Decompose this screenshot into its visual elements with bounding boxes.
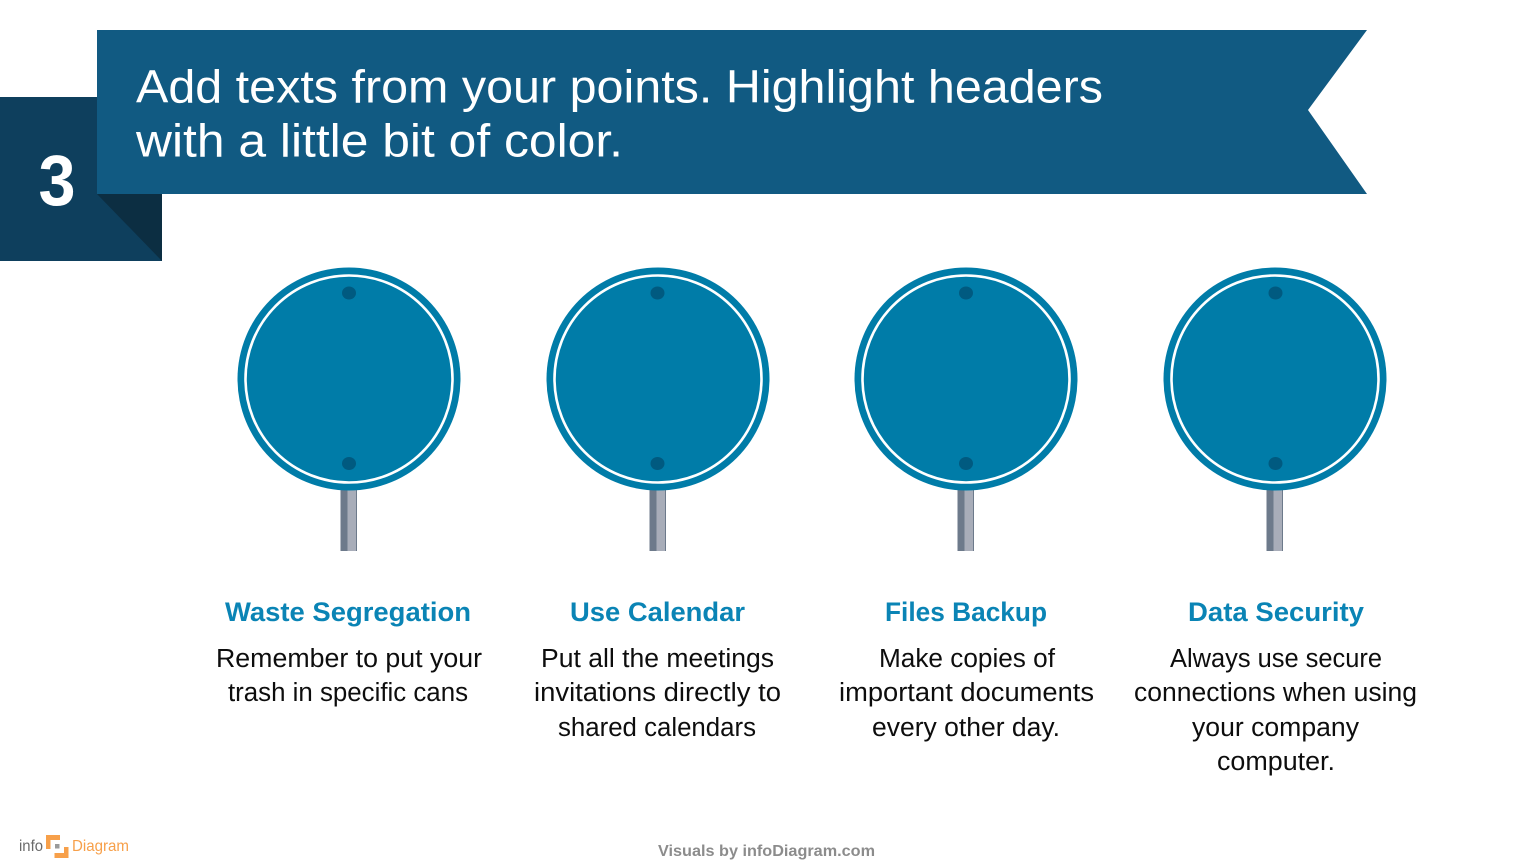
- description: Remember to put your: [216, 645, 483, 673]
- description: every other day.: [872, 714, 1060, 742]
- icon: road sign 4: [1164, 268, 1386, 551]
- heading: Files Backup: [885, 597, 1047, 627]
- description: connections when using: [1134, 679, 1417, 707]
- description: trash in specific cans: [228, 679, 468, 707]
- number 3: 3: [38, 142, 76, 221]
- description: Always use secure: [1170, 645, 1382, 673]
- footer credit: Visuals by infoDiagram.com: [658, 843, 875, 860]
- description: Make copies of: [879, 645, 1056, 673]
- icon: road sign 3: [854, 268, 1078, 551]
- heading: Data Security: [1188, 597, 1364, 627]
- title banner: [97, 30, 1367, 194]
- description: [839, 645, 1094, 742]
- description: Put all the meetings: [541, 645, 774, 673]
- logo: infoDiagram: info: [19, 838, 43, 855]
- icon: road sign 1: [238, 268, 460, 551]
- title: Add texts from your points. Highlight headers: [136, 60, 1103, 112]
- heading: Waste Segregation: [225, 597, 471, 627]
- description: your company: [1192, 714, 1359, 742]
- description: computer.: [1217, 748, 1335, 776]
- logo: infoDiagram: [19, 835, 129, 858]
- heading: Use Calendar: [570, 597, 745, 627]
- icon: road sign 2: [546, 268, 770, 551]
- number tab: [0, 97, 162, 261]
- logo: infoDiagram: Diagram: [72, 838, 129, 855]
- description: [216, 645, 483, 707]
- panel: files backup: [839, 268, 1094, 742]
- title: with a little bit of color.: [135, 114, 623, 166]
- description: shared calendars: [558, 714, 756, 742]
- description: invitations directly to: [534, 679, 781, 707]
- panel: use calendar: [534, 268, 781, 742]
- description: important documents: [839, 679, 1094, 707]
- panel: waste segregation: [216, 268, 483, 707]
- description: [1134, 645, 1417, 776]
- description: [534, 645, 781, 742]
- panel: data security: [1134, 268, 1417, 776]
- title: [135, 60, 1103, 166]
